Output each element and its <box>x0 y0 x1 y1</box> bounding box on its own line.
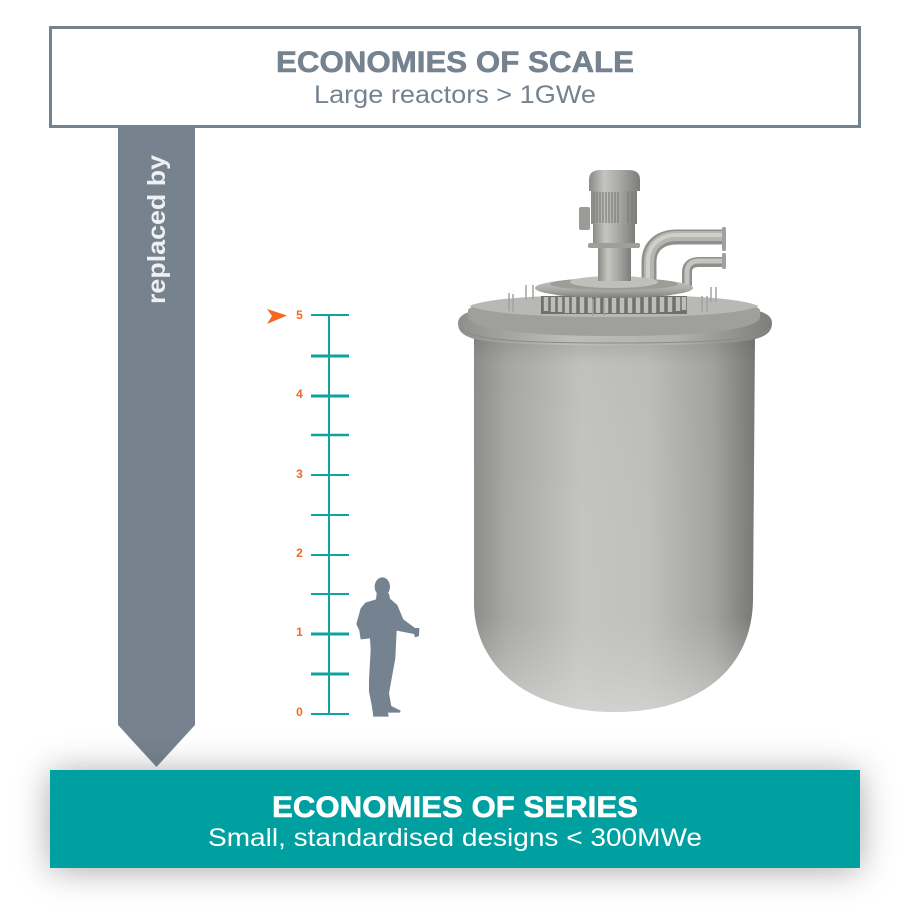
motor fins <box>591 191 637 224</box>
height scale: 2 <box>296 546 303 560</box>
large coolant pipe <box>648 235 723 282</box>
panel: economies of series <box>50 770 860 868</box>
heading: economies of series: ECONOMIES OF SERIES <box>272 791 638 824</box>
motor mounting flange <box>588 243 640 248</box>
top ring <box>535 278 693 298</box>
height scale: 1 <box>296 625 303 639</box>
reactor vessel <box>458 170 772 712</box>
panel: economies of scale <box>50 28 860 126</box>
small coolant pipe <box>687 261 723 286</box>
vessel body <box>474 335 755 712</box>
cooling ribs <box>541 296 687 314</box>
motor cap <box>589 170 640 191</box>
subheading: large reactors: Large reactors > 1GWe <box>314 81 596 109</box>
motor <box>593 222 635 243</box>
icon: worker silhouette <box>356 577 419 717</box>
height scale: 0 <box>296 705 303 719</box>
lower flange <box>458 310 772 346</box>
motor shaft <box>598 248 631 281</box>
arrow: replaced by <box>118 127 195 767</box>
upper plate <box>468 295 760 336</box>
subheading: small standardised designs: Small, standardised designs < 300MWe <box>208 824 702 852</box>
bolts <box>509 285 716 316</box>
arrow label: replaced by <box>143 155 171 304</box>
heading: economies of scale: ECONOMIES OF SCALE <box>276 46 634 79</box>
height scale <box>296 308 349 719</box>
height scale: 3 <box>296 467 303 481</box>
height scale: 4 <box>296 387 303 401</box>
height scale: 5 <box>296 308 303 322</box>
junction box <box>579 207 590 230</box>
icon: orange pointer <box>267 309 287 324</box>
